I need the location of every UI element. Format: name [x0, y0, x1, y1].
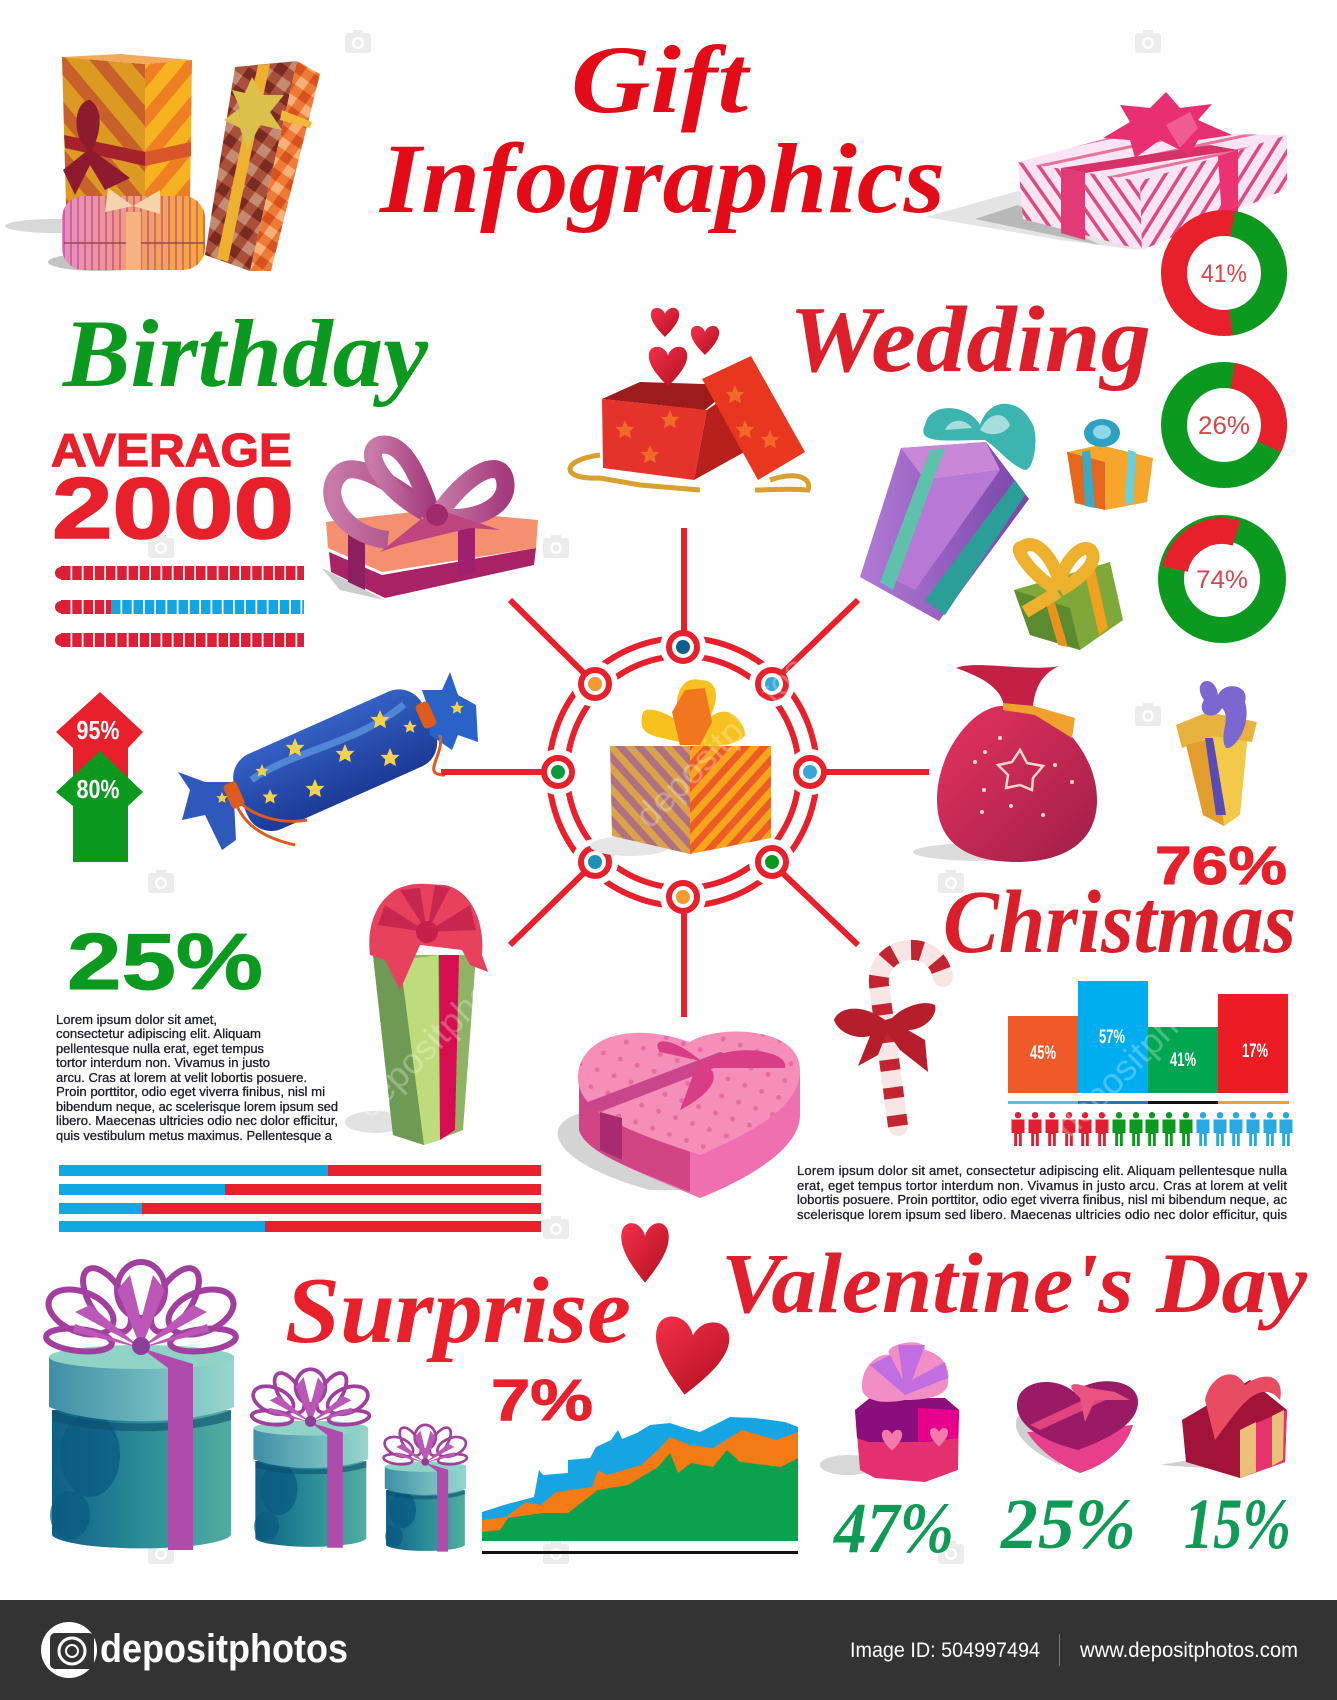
text block: left lorem ipsum: quis vestibulum metus maximus. Pellentesque a	[56, 1128, 333, 1143]
donut chart: 26%	[1166, 367, 1282, 483]
watermark: depositphotos	[1047, 958, 1234, 1146]
text block: left lorem ipsum: bibendum neque, ac scelerisque lorem ipsum sed	[56, 1099, 338, 1114]
double arrow stat: 95% and 80%	[56, 692, 143, 862]
illustration: small round teal gift	[382, 1424, 469, 1552]
text block: right lorem ipsum	[797, 1163, 1288, 1222]
image id: Image ID: 504997494	[850, 1639, 1040, 1662]
stat: 15%: 15%	[1184, 1484, 1291, 1564]
stat: average 2000	[51, 424, 294, 557]
heading: Surprise: Surprise	[285, 1259, 631, 1363]
text block: left lorem ipsum	[56, 1012, 338, 1143]
hub node: upper right	[758, 670, 786, 698]
heading: Valentine's Day: Valentine's Day	[721, 1235, 1308, 1331]
illustration: dark pink heart gift	[1016, 1381, 1138, 1473]
hub node: lower right	[758, 848, 786, 876]
heading: Wedding: Wedding	[789, 288, 1151, 392]
heading: Birthday: Birthday	[62, 300, 428, 407]
stat: average 2000: AVERAGE	[51, 424, 292, 476]
illustration: pink heart box	[558, 1032, 800, 1198]
illustration: house-shaped valentine gift	[1160, 1374, 1287, 1478]
footer bar	[0, 1600, 1337, 1700]
stat: average 2000: 2000	[52, 461, 294, 557]
donut chart: 41%	[1166, 215, 1282, 331]
bar chart: Christmas percentages	[1008, 981, 1289, 1104]
stacked bars	[59, 1165, 541, 1232]
illustration: Christmas sack	[913, 665, 1097, 862]
illustration: green gift with gold bow	[1014, 544, 1123, 650]
illustration: pink striped gift top right	[926, 92, 1287, 250]
segmented progress bars	[55, 567, 304, 646]
pictogram row of people	[1012, 1112, 1292, 1146]
stat: 76%: 76%	[1155, 836, 1287, 896]
text block: left lorem ipsum: consectetur adipiscing elit. Aliquam	[56, 1026, 261, 1041]
donut chart: 74%	[1165, 522, 1279, 636]
illustration: medium round teal gift	[249, 1368, 372, 1548]
title: Gift Infographics: Gift	[571, 26, 752, 133]
bar chart: Christmas percentages: 17%	[1242, 1041, 1268, 1062]
bar chart: Christmas percentages: 45%	[1030, 1043, 1056, 1064]
bar chart: Christmas percentages: 57%	[1099, 1027, 1125, 1048]
illustration: central striped gift with bow	[590, 679, 771, 856]
hub node: top	[669, 633, 697, 661]
illustration: small orange gift	[1067, 419, 1153, 510]
hub node: left	[544, 758, 572, 786]
double arrow stat: 95% and 80%: 80%	[76, 774, 120, 804]
hub node: bottom	[669, 883, 697, 911]
text block: right lorem ipsum: lobortis posuere. Proin porttitor, odio eget viverra finibus, nisl mi bibendum neque, ac	[797, 1192, 1288, 1207]
hub node: lower left	[581, 848, 609, 876]
illustration: hexagonal valentine gift	[820, 1342, 959, 1482]
illustration: open red gift with hearts	[570, 308, 809, 490]
watermark	[347, 648, 1234, 1146]
logo wordmark: depositphotos	[100, 1627, 348, 1671]
illustration: floating hearts	[621, 1223, 731, 1400]
heading: Christmas: Christmas	[943, 873, 1296, 972]
bar chart: Christmas percentages: 41%	[1170, 1050, 1196, 1071]
stat: 7%: 7%	[491, 1368, 593, 1433]
donut chart: 41%: 41%	[1201, 260, 1247, 288]
illustration: blue candy gift	[178, 672, 478, 850]
stat: 25% valentine: 25%	[1000, 1484, 1136, 1564]
illustration: large round teal gift	[42, 1260, 240, 1550]
stat: 25%: 25%	[67, 917, 263, 1006]
text block: right lorem ipsum: erat, eget tempus tortor interdum non. Vivamus in justo arcu. Cras at lorem at velit	[797, 1178, 1287, 1193]
watermark: depositphotos	[347, 938, 534, 1126]
watermark camera icons	[148, 30, 1161, 1564]
illustration: three gifts top left	[5, 54, 320, 271]
stat: 47%: 47%	[832, 1488, 954, 1568]
area chart	[482, 1417, 798, 1554]
illustration: gift with pink ribbon bow	[322, 445, 538, 600]
website url: www.depositphotos.com	[1079, 1639, 1298, 1662]
double arrow stat: 95% and 80%: 95%	[76, 715, 120, 745]
text block: left lorem ipsum: Proin porttitor, odio eget viverra finibus, nisl mi	[56, 1084, 325, 1099]
text block: right lorem ipsum: Lorem ipsum dolor sit amet, consectetur adipiscing elit. Aliquam pellentesque nulla	[797, 1163, 1288, 1178]
hub node: upper left	[581, 670, 609, 698]
title: Gift Infographics: Infographics	[379, 123, 945, 234]
illustration: small yellow gift with purple bow	[1176, 681, 1257, 826]
text block: left lorem ipsum: tortor interdum non. Vivamus in justo	[56, 1055, 270, 1070]
hub diagram: central rings, spokes and nodes	[441, 528, 929, 1017]
logo icon: camera	[41, 1622, 97, 1678]
text block: right lorem ipsum: scelerisque lorem ipsum sed libero. Maecenas ultricies odio nec dolor efficitur, quis	[797, 1207, 1288, 1222]
donut chart: 74%: 74%	[1196, 566, 1248, 594]
watermark: depositphotos	[627, 648, 814, 836]
title: Gift Infographics	[379, 26, 945, 234]
text block: left lorem ipsum: Lorem ipsum dolor sit amet,	[56, 1012, 217, 1027]
illustration: candy cane with red bow	[834, 950, 943, 1126]
illustration: purple wedding gift	[860, 404, 1035, 621]
text block: left lorem ipsum: pellentesque nulla erat, eget tempus	[56, 1041, 264, 1056]
illustration: tall green gift with red bow	[345, 884, 488, 1145]
donut chart: 26%: 26%	[1198, 412, 1250, 440]
hub node: right	[796, 758, 824, 786]
text block: left lorem ipsum: libero. Maecenas ultricies odio nec dolor efficitur,	[56, 1113, 338, 1128]
text block: left lorem ipsum: arcu. Cras at lorem at velit lobortis posuere.	[56, 1070, 307, 1085]
